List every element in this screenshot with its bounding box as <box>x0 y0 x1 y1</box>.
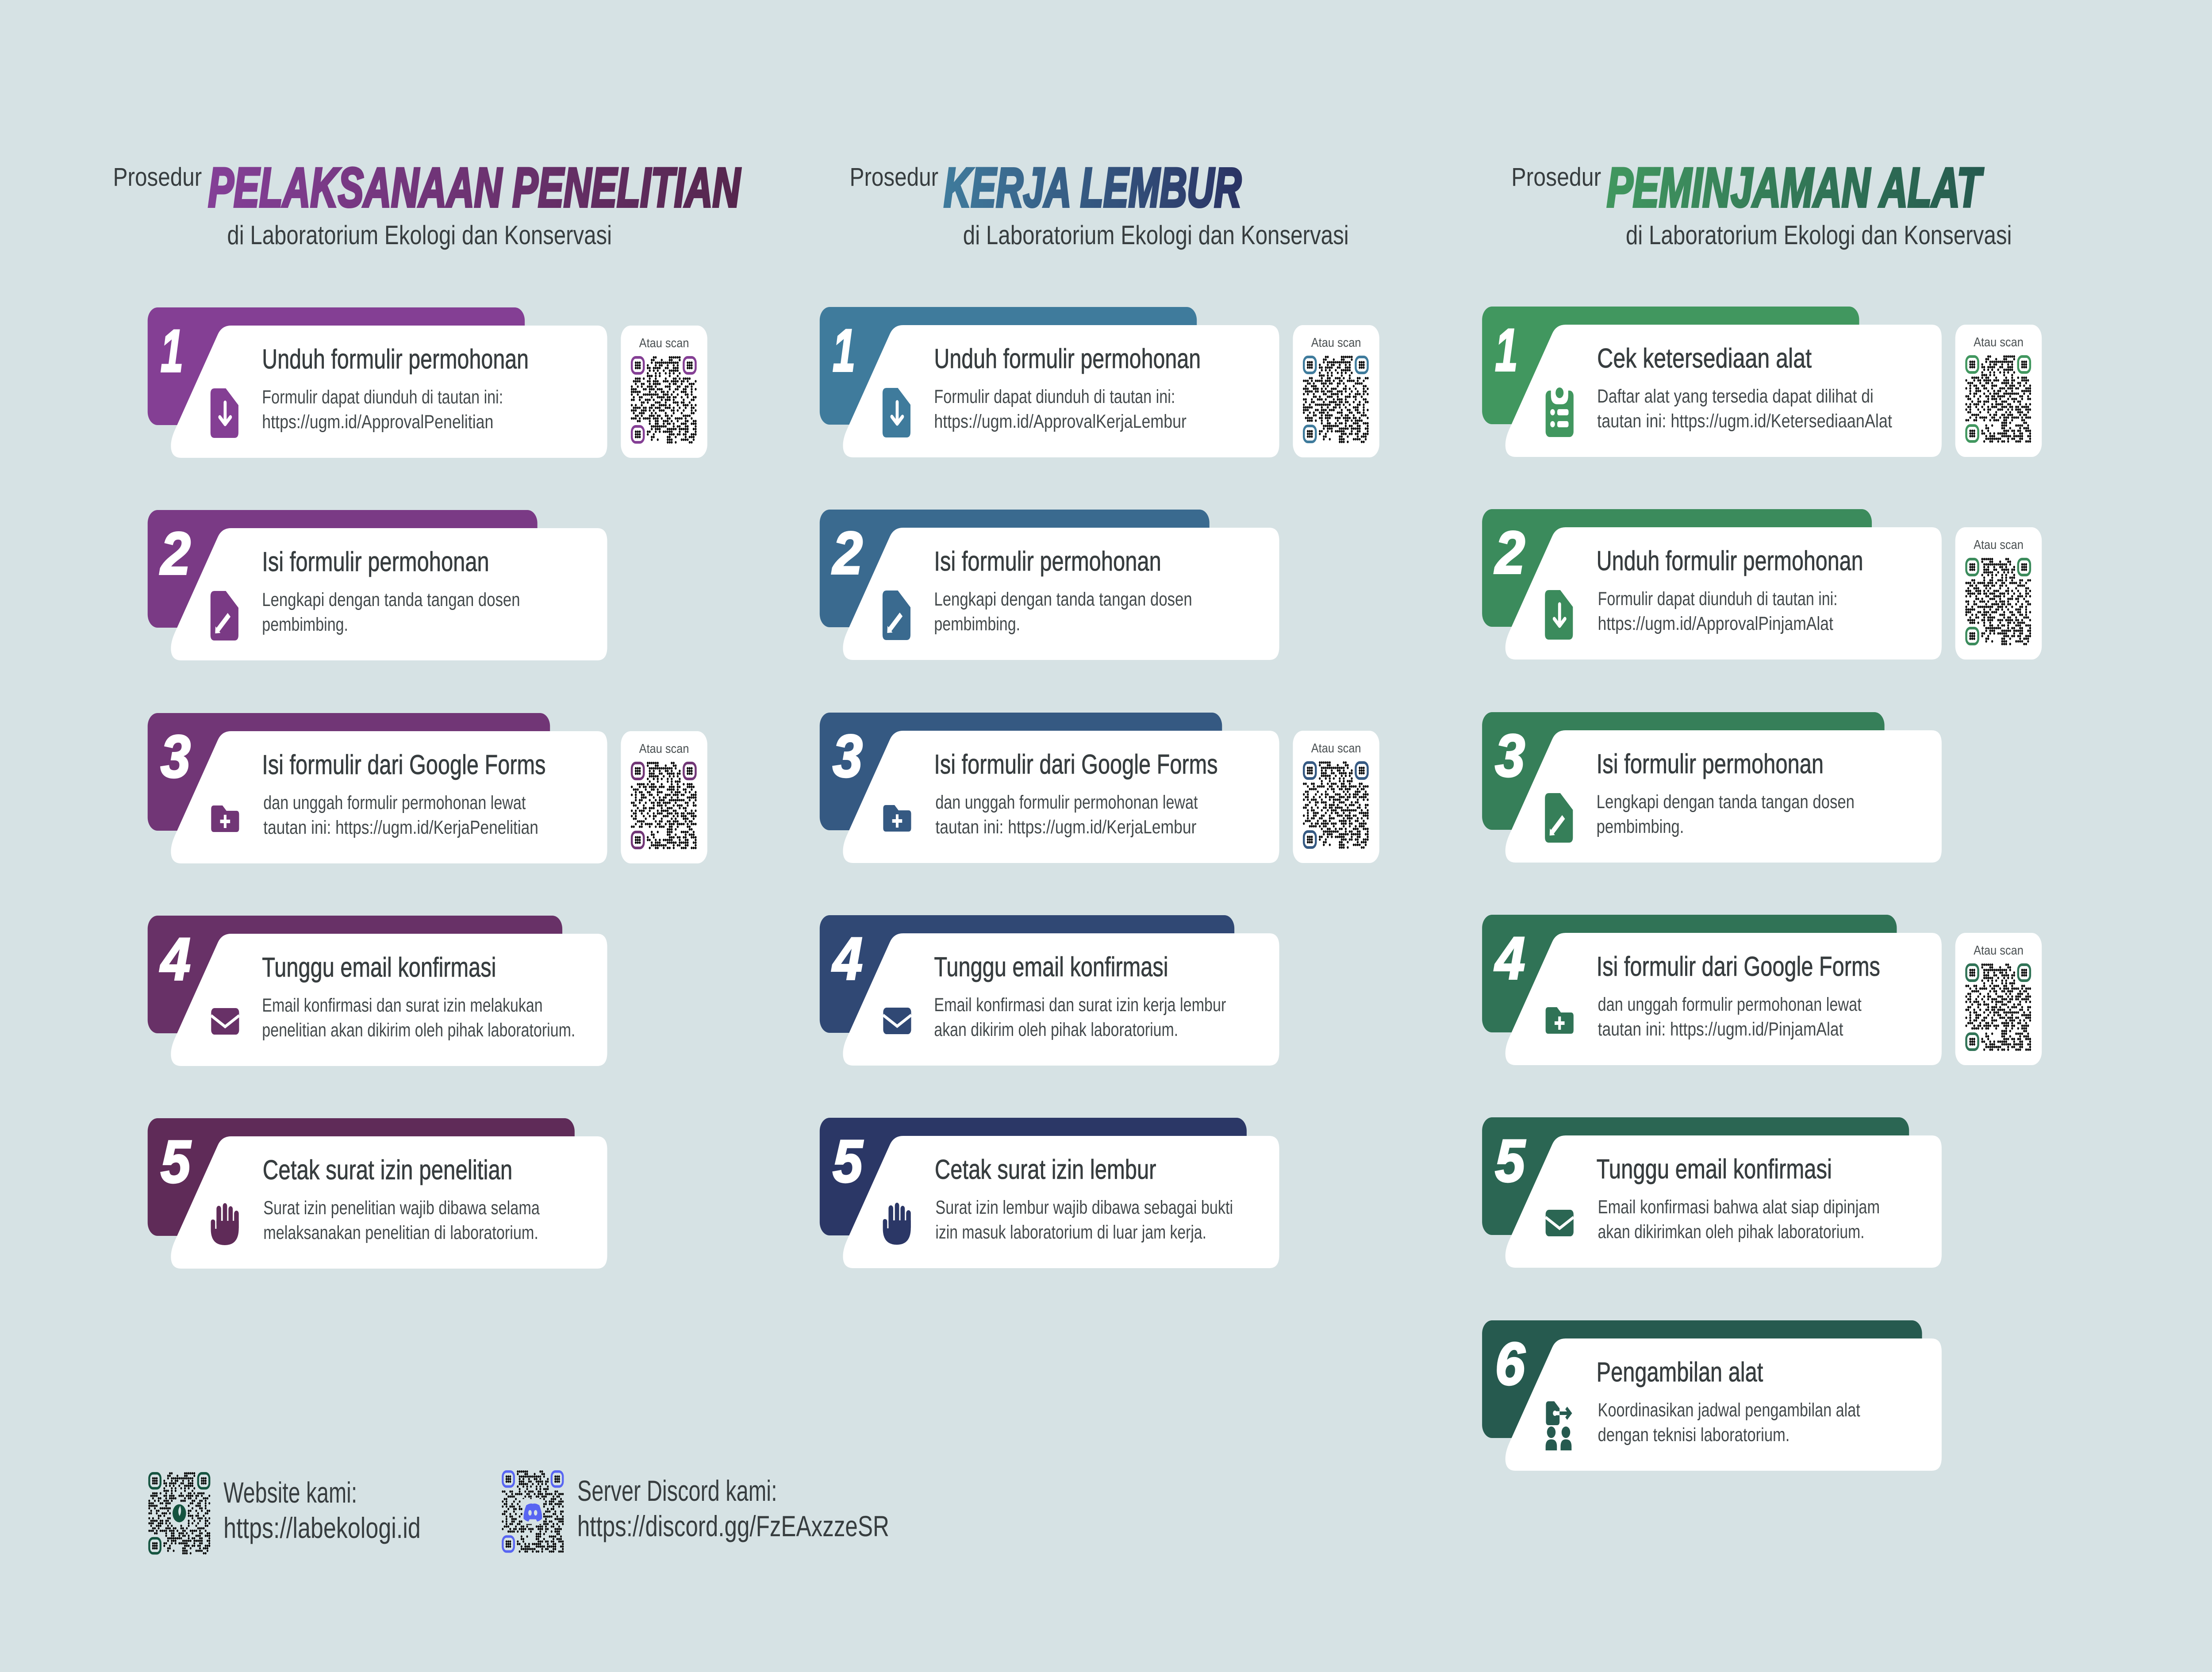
icon: envelope <box>883 1008 911 1034</box>
step description: penelitian akan dikirim oleh pihak laboratorium. <box>262 1020 575 1041</box>
icon: handover <box>1546 1401 1571 1450</box>
qr card: Atau scan <box>1974 335 2024 349</box>
qr card <box>1293 731 1379 863</box>
step number: 2 <box>160 520 191 587</box>
step description <box>1598 1197 1880 1242</box>
step description: Surat izin lembur wajib dibawa sebagai bukti <box>935 1197 1233 1218</box>
discord text <box>577 1475 889 1543</box>
card <box>1505 933 1942 1065</box>
step title: Pengambilan alat <box>1597 1356 1763 1388</box>
discord text: Server Discord kami: <box>577 1475 777 1507</box>
step number: 1 <box>161 318 183 384</box>
step description: tautan ini: https://ugm.id/KetersediaanAlat <box>1597 411 1892 432</box>
card <box>1505 527 1942 660</box>
step title: Isi formulir permohonan <box>262 546 489 577</box>
step description: Lengkapi dengan tanda tangan dosen <box>1597 792 1855 813</box>
qr card: Atau scan <box>1974 943 2024 958</box>
step description: dan unggah formulir permohonan lewat <box>1598 994 1862 1015</box>
card <box>171 934 607 1066</box>
step 1: unduh formulir <box>148 307 707 458</box>
qr card <box>621 326 707 458</box>
number tab <box>1482 1320 1922 1438</box>
step 2: unduh formulir <box>1482 509 2042 660</box>
number tab <box>820 713 1222 830</box>
step 4: tunggu email <box>820 915 1279 1066</box>
step title: Unduh formulir permohonan <box>262 343 529 375</box>
step 1: unduh formulir <box>820 307 1379 457</box>
qr: discord <box>503 1472 563 1552</box>
step description <box>934 387 1187 432</box>
step 2: isi formulir <box>820 510 1279 660</box>
step 6: pengambilan alat <box>1482 1320 1942 1471</box>
card <box>1505 1135 1942 1268</box>
step number: 1 <box>833 317 855 384</box>
panel: prosedur pelaksanaan penelitian <box>113 157 741 1269</box>
step number: 4 <box>1494 925 1525 992</box>
heading: pelaksanaan penelitian <box>113 157 741 250</box>
step number: 3 <box>1495 722 1525 789</box>
step description: pembimbing. <box>262 614 348 635</box>
step number: 3 <box>833 723 863 790</box>
step description <box>934 589 1192 635</box>
step description: dan unggah formulir permohonan lewat <box>263 793 526 813</box>
heading: kerja lembur <box>849 157 1349 250</box>
icon: file pen <box>211 591 238 640</box>
step description: Daftar alat yang tersedia dapat dilihat di <box>1597 386 1874 407</box>
number tab <box>1482 712 1885 830</box>
step description: pembimbing. <box>934 614 1020 635</box>
card <box>171 326 607 458</box>
footer: discord <box>503 1472 889 1552</box>
step description <box>1598 1400 1860 1446</box>
step description <box>262 995 575 1041</box>
heading: peminjaman alat: Prosedur <box>1511 163 1601 191</box>
icon: file download <box>211 388 238 438</box>
qr card <box>1293 325 1379 457</box>
icon: clipboard <box>1546 387 1574 437</box>
number tab <box>148 307 525 425</box>
heading: pelaksanaan penelitian: PELAKSANAAN PENELITIAN <box>208 157 741 219</box>
icon: hand <box>211 1203 239 1245</box>
qr card <box>1955 325 2042 457</box>
website text: Website kami: <box>223 1476 357 1509</box>
qr card: Atau scan <box>1311 741 1361 755</box>
step description: akan dikirimkan oleh pihak laboratorium. <box>1598 1222 1865 1242</box>
step description: tautan ini: https://ugm.id/KerjaLembur <box>935 817 1197 838</box>
heading: pelaksanaan penelitian: Prosedur <box>113 163 202 191</box>
number tab <box>820 510 1210 627</box>
step description <box>934 995 1226 1040</box>
step 5: cetak surat <box>148 1118 607 1269</box>
step description <box>262 590 520 635</box>
step title: Cek ketersediaan alat <box>1597 342 1812 374</box>
qr card <box>1955 527 2042 660</box>
icon: file pen <box>1545 793 1573 843</box>
icon: folder plus <box>211 805 239 832</box>
step description: izin masuk laboratorium di luar jam kerja. <box>935 1222 1206 1243</box>
step description <box>1597 386 1892 432</box>
card <box>171 1136 607 1269</box>
heading: kerja lembur: Prosedur <box>849 163 938 191</box>
number tab <box>820 307 1197 425</box>
step description <box>935 1197 1233 1243</box>
step description: akan dikirim oleh pihak laboratorium. <box>934 1020 1178 1040</box>
panel: prosedur peminjaman alat <box>1482 157 2042 1471</box>
step description: Surat izin penelitian wajib dibawa selama <box>263 1198 540 1219</box>
qr card: Atau scan <box>639 742 689 756</box>
step 4: google forms <box>1482 915 2042 1065</box>
number tab <box>1482 509 1872 627</box>
step number: 2 <box>1494 519 1525 586</box>
card <box>843 325 1279 457</box>
heading: peminjaman alat <box>1511 157 2012 250</box>
card <box>843 528 1279 660</box>
number tab <box>1482 1117 1909 1235</box>
step 2: isi formulir <box>148 510 607 660</box>
footer: website <box>149 1473 421 1553</box>
number tab <box>148 1118 575 1236</box>
card <box>1505 730 1942 863</box>
step title: Isi formulir dari Google Forms <box>934 748 1218 780</box>
step number: 5 <box>1495 1127 1526 1194</box>
icon: folder plus <box>1546 1007 1574 1034</box>
discord text: https://discord.gg/FzEAxzzeSR <box>577 1510 889 1543</box>
step title: Cetak surat izin penelitian <box>263 1154 512 1185</box>
step title: Isi formulir dari Google Forms <box>262 749 545 780</box>
step 5: cetak surat <box>820 1118 1279 1268</box>
qr card <box>621 731 707 863</box>
step title: Unduh formulir permohonan <box>1597 545 1863 576</box>
step description: Formulir dapat diunduh di tautan ini: <box>262 387 503 408</box>
step 5: tunggu email <box>1482 1117 1942 1268</box>
step number: 2 <box>832 520 863 587</box>
step description <box>262 387 503 433</box>
step number: 6 <box>1495 1331 1525 1397</box>
icon: file download <box>883 388 910 437</box>
heading: kerja lembur: di Laboratorium Ekologi dan Konservasi <box>963 221 1349 250</box>
step title: Unduh formulir permohonan <box>934 343 1201 374</box>
card <box>843 731 1279 863</box>
icon: envelope <box>211 1008 239 1035</box>
card <box>1505 1338 1942 1471</box>
step description: Email konfirmasi dan surat izin melakukan <box>262 995 543 1016</box>
step description: https://ugm.id/ApprovalPenelitian <box>262 412 493 433</box>
step 3: google forms <box>820 713 1379 863</box>
icon: file download <box>1545 590 1573 640</box>
number tab <box>820 1118 1247 1235</box>
card <box>1505 325 1942 457</box>
step number: 4 <box>832 925 863 992</box>
step 1: cek ketersediaan <box>1482 307 2042 457</box>
number tab <box>148 510 538 628</box>
step description: melaksanakan penelitian di laboratorium. <box>263 1223 538 1243</box>
step description <box>935 792 1198 838</box>
qr card: Atau scan <box>1311 336 1361 350</box>
icon: envelope <box>1546 1210 1574 1236</box>
step number: 4 <box>160 926 191 993</box>
step description <box>1597 792 1855 837</box>
heading: peminjaman alat: di Laboratorium Ekologi dan Konservasi <box>1626 221 2012 250</box>
step title: Cetak surat izin lembur <box>935 1154 1156 1185</box>
step 3: isi formulir <box>1482 712 1942 863</box>
number tab <box>820 915 1234 1033</box>
step title: Isi formulir permohonan <box>934 545 1161 577</box>
step title: Isi formulir dari Google Forms <box>1597 951 1880 982</box>
step description: Koordinasikan jadwal pengambilan alat <box>1598 1400 1860 1421</box>
card <box>843 1136 1279 1268</box>
card <box>171 731 607 863</box>
step description: Email konfirmasi dan surat izin kerja lembur <box>934 995 1226 1016</box>
qr card: Atau scan <box>1974 538 2024 552</box>
website text <box>223 1476 421 1545</box>
number tab <box>148 713 550 831</box>
step description: dan unggah formulir permohonan lewat <box>935 792 1198 813</box>
qr card: Atau scan <box>639 336 689 350</box>
icon: file pen <box>883 591 910 640</box>
heading: peminjaman alat: PEMINJAMAN ALAT <box>1607 157 1984 219</box>
icon: folder plus <box>883 805 911 832</box>
step description: tautan ini: https://ugm.id/KerjaPenelitian <box>263 817 538 838</box>
card <box>843 933 1279 1066</box>
panel: prosedur kerja lembur <box>820 157 1379 1268</box>
step description <box>1598 994 1862 1040</box>
step 4: tunggu email <box>148 916 607 1066</box>
step description: https://ugm.id/ApprovalKerjaLembur <box>934 411 1187 432</box>
qr card <box>1955 933 2042 1065</box>
step description: Lengkapi dengan tanda tangan dosen <box>262 590 520 610</box>
step description: tautan ini: https://ugm.id/PinjamAlat <box>1598 1019 1843 1040</box>
step title: Isi formulir permohonan <box>1597 748 1824 779</box>
step number: 3 <box>161 723 191 790</box>
step description <box>1598 589 1838 634</box>
step title: Tunggu email konfirmasi <box>262 951 496 983</box>
step number: 5 <box>833 1128 864 1195</box>
step title: Tunggu email konfirmasi <box>1597 1153 1832 1185</box>
step title: Tunggu email konfirmasi <box>934 951 1168 982</box>
step description: dengan teknisi laboratorium. <box>1598 1425 1790 1446</box>
number tab <box>1482 307 1859 424</box>
number tab <box>1482 915 1897 1032</box>
website text: https://labekologi.id <box>223 1512 421 1545</box>
step number: 5 <box>161 1128 192 1195</box>
card <box>171 528 607 660</box>
qr: website <box>149 1473 210 1553</box>
step description: Formulir dapat diunduh di tautan ini: <box>1598 589 1838 610</box>
step description: pembimbing. <box>1597 817 1684 837</box>
heading: kerja lembur: KERJA LEMBUR <box>944 157 1241 219</box>
step description: Formulir dapat diunduh di tautan ini: <box>934 387 1175 407</box>
step number: 1 <box>1495 317 1518 383</box>
icon: hand <box>883 1203 911 1245</box>
step description: Lengkapi dengan tanda tangan dosen <box>934 589 1192 610</box>
step description <box>263 793 538 838</box>
step description <box>263 1198 540 1243</box>
number tab <box>148 916 562 1033</box>
step description: Email konfirmasi bahwa alat siap dipinjam <box>1598 1197 1880 1218</box>
heading: pelaksanaan penelitian: di Laboratorium Ekologi dan Konservasi <box>227 221 612 250</box>
step description: https://ugm.id/ApprovalPinjamAlat <box>1598 614 1833 634</box>
step 3: google forms <box>148 713 707 863</box>
